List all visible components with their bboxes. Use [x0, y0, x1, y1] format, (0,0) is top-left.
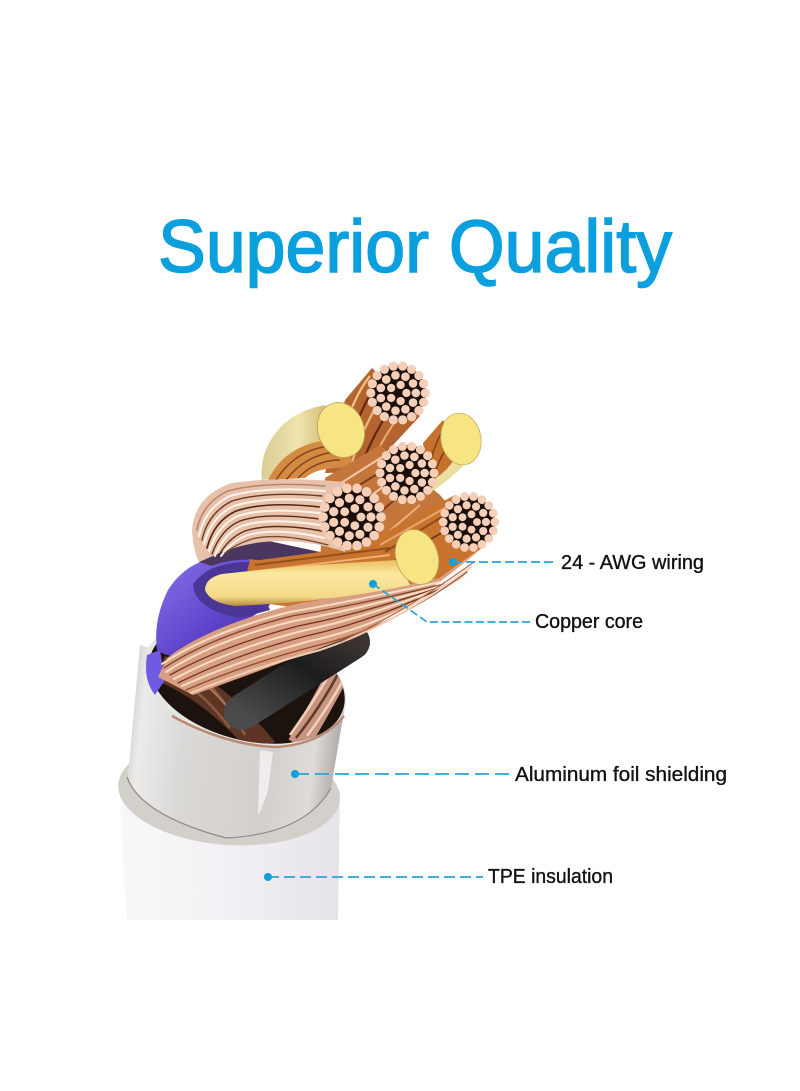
infographic canvas [118, 217, 726, 920]
left copper bundle [192, 479, 345, 562]
dark purple collar around gold tip [193, 562, 270, 618]
jacket collar ring [115, 731, 343, 853]
big lower sweeping copper bundle [158, 550, 480, 695]
gold wire back arc [262, 405, 335, 480]
TPE insulation jacket [120, 790, 340, 920]
callout: aluminum foil shielding: Aluminum foil shielding [515, 764, 727, 786]
orange strand under back arc [268, 440, 352, 480]
right gold wire tail [423, 420, 466, 490]
gold wire end: front [388, 524, 446, 590]
callout: aluminum foil shielding [291, 764, 727, 786]
orange top bundle behind top strands [325, 368, 420, 473]
foil opening rim [130, 596, 360, 768]
foil base seam [127, 777, 331, 838]
gold wire end: right [437, 410, 485, 468]
inner strands [160, 660, 345, 750]
purple wire [156, 556, 270, 656]
callout: copper core [369, 580, 643, 633]
right conductor bundle end [439, 492, 499, 552]
left conductor bundle end [318, 484, 386, 550]
callout: TPE insulation: TPE insulation [488, 866, 613, 888]
callout: 24-AWG wiring: 24 - AWG wiring [561, 552, 704, 574]
top conductor bundle end [366, 362, 430, 424]
middle copper strands [330, 452, 430, 540]
purple reflection on rim [146, 650, 165, 695]
gold wire end: back [310, 396, 372, 464]
rim copper reflection [172, 716, 344, 747]
right copper bundle tail [240, 495, 482, 615]
title: Superior Quality [158, 205, 672, 288]
foil highlight streak [258, 750, 273, 815]
aluminum foil shield [128, 645, 346, 838]
middle conductor bundle end [375, 442, 439, 504]
front gold copper-core wire [205, 560, 410, 606]
callout: 24-AWG wiring [449, 552, 704, 574]
dark strands under left bundle [199, 538, 320, 566]
dark cable interior [135, 600, 359, 764]
callout: copper core: Copper core [535, 611, 643, 633]
callout: TPE insulation [264, 866, 613, 888]
cable illustration [115, 362, 499, 920]
central copper fill between bundles [320, 445, 482, 592]
black wire [242, 642, 352, 712]
